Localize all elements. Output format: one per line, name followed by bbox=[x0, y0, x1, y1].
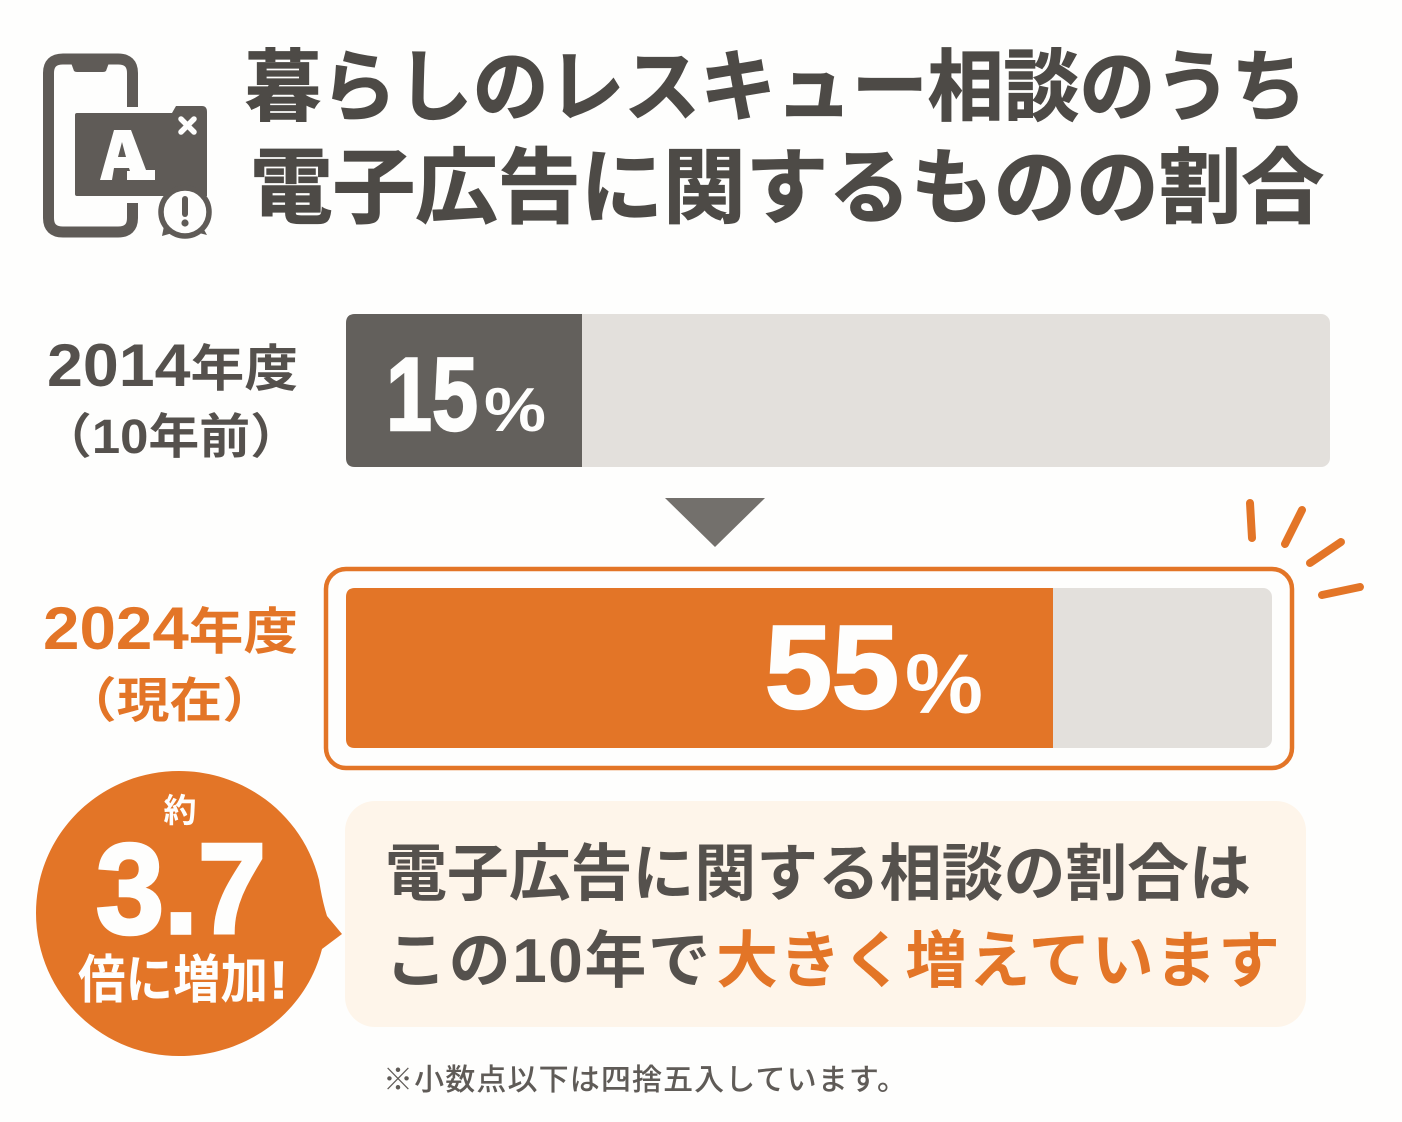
label: 2024: 2024年度 bbox=[43, 595, 298, 662]
label: 2024 bbox=[43, 595, 298, 728]
badge: about 3.7 times: 3.7 bbox=[96, 818, 266, 961]
icon: smartphone advertisement warning bbox=[48, 59, 209, 236]
badge: about 3.7 times: 倍に増加 bbox=[78, 952, 268, 1010]
arrow: down bbox=[665, 498, 765, 547]
bar: 2014 15% bbox=[346, 314, 1330, 467]
icon: emphasis rays bbox=[1250, 503, 1360, 595]
title bbox=[245, 43, 1324, 234]
bar: 2024 55%: 55 bbox=[765, 602, 899, 734]
title: 電子広告に関するものの割合 bbox=[250, 143, 1324, 234]
bar: 2024 55% bbox=[326, 569, 1292, 768]
panel: summary message: この10年で bbox=[385, 927, 710, 996]
label: 2014: 2014年度 bbox=[47, 332, 298, 399]
panel: summary message: 電子広告に関する相談の割合は bbox=[385, 840, 1251, 909]
badge: about 3.7 times: ! bbox=[270, 952, 287, 1010]
footnote: ※小数点以下は四捨五入しています。 bbox=[383, 1064, 907, 1097]
panel: summary message bbox=[345, 801, 1306, 1027]
title: 暮らしのレスキュー相談のうち bbox=[245, 43, 1307, 131]
bar: 2024 55%: % bbox=[905, 637, 983, 731]
badge: about 3.7 times: 約 bbox=[164, 792, 196, 829]
label: 2024: （現在） bbox=[64, 675, 275, 728]
bar: 2014 15%: % bbox=[484, 376, 546, 445]
panel: summary message: 大きく増えています bbox=[716, 927, 1280, 996]
label: 2014 bbox=[41, 332, 301, 464]
badge: about 3.7 times bbox=[36, 771, 342, 1056]
label: 2014: （10年前） bbox=[41, 411, 301, 464]
bar: 2014 15%: 15 bbox=[386, 337, 478, 453]
